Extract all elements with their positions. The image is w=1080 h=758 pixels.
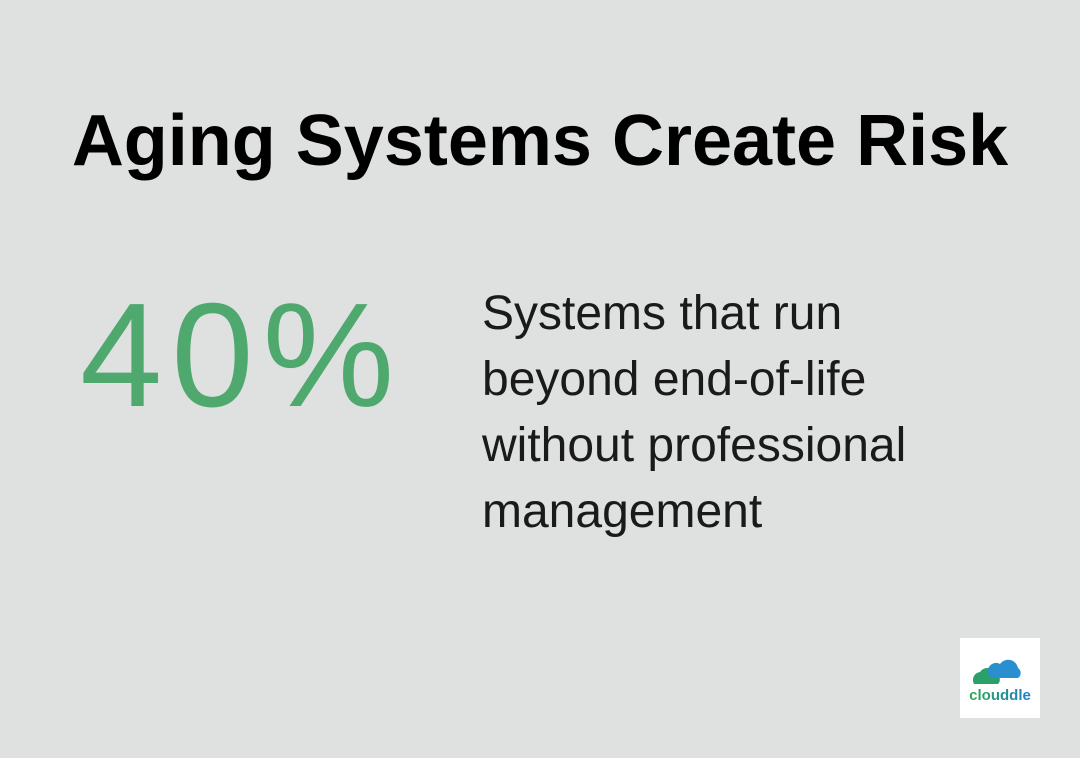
stat description: without professional <box>482 419 906 472</box>
logo: clouddle <box>960 638 1040 718</box>
stat number: 40% <box>80 273 403 438</box>
stat description: management <box>482 485 762 538</box>
stat description: beyond end-of-life <box>482 353 866 406</box>
stat description: Systems that run <box>482 287 842 340</box>
stat description <box>482 287 906 538</box>
logo: clouddle: clouddle <box>969 687 1031 704</box>
title: Aging Systems Create Risk <box>72 101 1008 181</box>
